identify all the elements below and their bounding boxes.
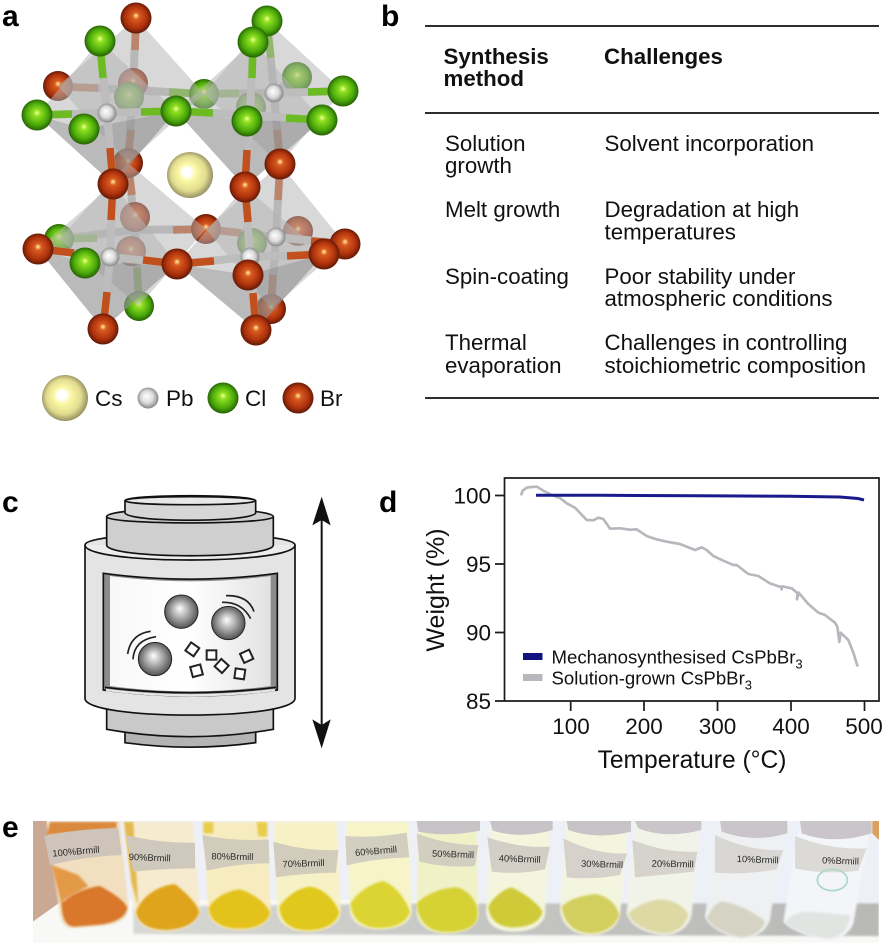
vial 70%: 70%Brmill <box>282 858 325 869</box>
row: thermal evaporation <box>445 330 866 378</box>
x tick labels: 500 <box>845 714 883 739</box>
octahedra <box>37 18 345 330</box>
x tick labels: 100 <box>552 714 590 739</box>
table header: Challenges <box>604 44 723 69</box>
chart legend: Solution-grown CsPbBr <box>552 668 745 688</box>
vial 100% <box>44 822 128 928</box>
row: solution growth: Solution <box>445 131 526 156</box>
table header <box>444 44 723 91</box>
front atoms <box>22 2 360 346</box>
row: spin-coating: Poor stability under <box>604 264 796 289</box>
x tick labels: 400 <box>772 714 810 739</box>
powder particles <box>185 642 253 679</box>
row: melt growth <box>445 197 799 244</box>
row: solution growth: growth <box>445 153 512 178</box>
legend Br <box>282 382 343 414</box>
panel c: milling jar schematic <box>85 496 331 748</box>
legend Cs <box>42 375 122 421</box>
window <box>103 573 277 696</box>
legend Cs: Cs <box>95 386 122 411</box>
Cs atom <box>167 152 213 198</box>
vial 20%: 20%Brmill <box>652 859 694 869</box>
vial 10% <box>705 821 787 938</box>
vial 60% <box>345 822 412 929</box>
row: spin-coating: atmospheric conditions <box>604 286 833 311</box>
row: melt growth: Degradation at high <box>604 197 799 222</box>
vial 0%: 0%Brmill <box>822 855 859 867</box>
panel b: table <box>425 26 879 398</box>
x tick labels: 200 <box>625 714 663 739</box>
table header: Synthesis <box>444 44 549 69</box>
axes frame and ticks <box>495 478 879 711</box>
y tick labels: 100 <box>453 484 491 508</box>
row: thermal evaporation: stoichiometric composition <box>604 353 866 378</box>
panel d: TGA chart <box>422 478 883 774</box>
back atoms <box>43 62 313 324</box>
vial 90%: 90%Brmill <box>129 852 171 863</box>
y tick labels <box>453 484 491 714</box>
series: solution-grown <box>521 487 858 667</box>
vial 40% <box>486 821 553 932</box>
panel a label: a <box>2 0 19 33</box>
panel e: photo of vials <box>33 821 879 943</box>
upper caps <box>85 496 295 560</box>
legend: atoms <box>42 375 343 421</box>
row: thermal evaporation: evaporation <box>445 353 562 378</box>
row: spin-coating <box>445 264 833 311</box>
row: solution growth: Solvent incorporation <box>604 131 814 156</box>
photo background <box>33 821 879 943</box>
row: thermal evaporation: Challenges in controlling <box>604 330 847 355</box>
legend Cl: Cl <box>245 386 266 411</box>
table header: method <box>444 66 524 91</box>
vial 30% <box>560 821 631 935</box>
row: melt growth: Melt growth <box>445 197 560 222</box>
vial 30%: 30%Brmill <box>581 859 623 870</box>
milling balls <box>138 595 245 676</box>
chart legend: Mechanosynthesised CsPbBr <box>552 646 795 668</box>
x tick labels: 300 <box>699 714 736 739</box>
vial 20% <box>627 821 701 935</box>
panel c label: c <box>2 486 19 519</box>
lower caps <box>107 703 273 747</box>
panel b label: b <box>381 0 399 33</box>
jar body <box>85 534 295 715</box>
panel a: crystal structure <box>22 2 360 346</box>
vial 90% <box>124 822 200 932</box>
row: solution growth <box>445 131 814 178</box>
row: spin-coating: Spin-coating <box>445 264 569 289</box>
vial 0% <box>783 821 872 940</box>
chart legend <box>523 646 803 692</box>
chart legend: 3 <box>795 656 803 672</box>
vial 60%: 60%Brmill <box>355 844 397 858</box>
y axis title: Weight (%) <box>422 528 450 652</box>
vial 70% <box>273 822 341 932</box>
vial 50% <box>417 821 480 933</box>
vial 80% <box>202 822 271 930</box>
vial 100%: 100%Brmill <box>52 845 100 859</box>
vial 10%: 10%Brmill <box>737 854 779 865</box>
double-headed arrow <box>312 497 331 748</box>
Pb atoms <box>98 84 286 266</box>
panel e label: e <box>2 811 19 844</box>
legend Pb: Pb <box>166 386 194 411</box>
legend Br: Br <box>320 386 343 411</box>
y tick labels: 90 <box>466 620 491 646</box>
panel d label: d <box>379 486 397 519</box>
vial 50%: 50%Brmill <box>432 849 474 860</box>
motion arcs <box>128 596 254 659</box>
y tick labels: 95 <box>466 552 491 577</box>
vial 40%: 40%Brmill <box>499 853 541 865</box>
series: mechanosynthesised <box>536 495 864 500</box>
y tick labels: 85 <box>466 689 491 714</box>
legend Cl <box>208 382 266 414</box>
row: melt growth: temperatures <box>604 220 736 244</box>
vial 80%: 80%Brmill <box>211 851 253 862</box>
chart legend: 3 <box>745 678 752 692</box>
legend Pb <box>138 386 194 411</box>
x axis title: Temperature (°C) <box>598 747 786 774</box>
back bonds <box>58 18 343 309</box>
front bonds <box>37 41 345 330</box>
row: thermal evaporation: Thermal <box>445 330 527 355</box>
x tick labels <box>552 714 883 739</box>
